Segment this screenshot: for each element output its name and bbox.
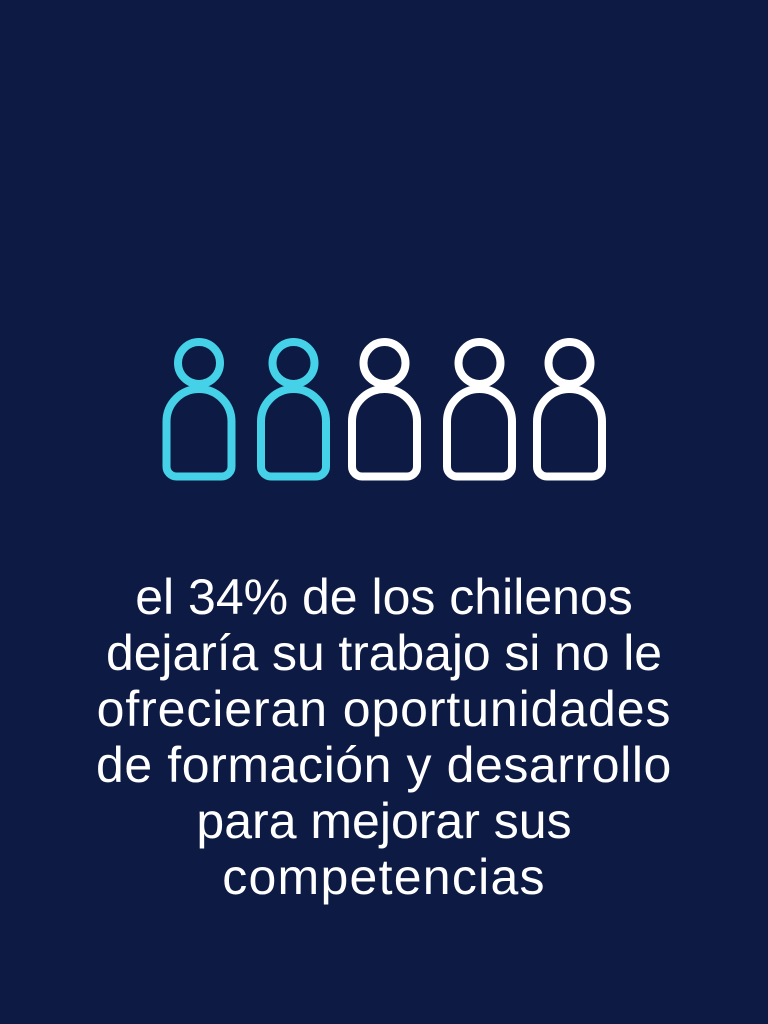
statistic text xyxy=(96,569,672,905)
statistic text: para mejorar sus xyxy=(196,793,572,849)
statistic text: ofrecieran oportunidades xyxy=(97,681,671,737)
statistic text: de formación y desarrollo xyxy=(96,737,672,793)
person 2 cyan xyxy=(261,342,326,476)
person 4 white xyxy=(447,342,512,476)
statistic text: el 34% de los chilenos xyxy=(135,569,633,625)
statistic text: competencias xyxy=(222,849,546,905)
person 3 white xyxy=(352,342,417,476)
statistic text: dejaría su trabajo si no le xyxy=(106,625,662,681)
person 1 cyan xyxy=(166,342,232,476)
person 5 white xyxy=(537,342,602,476)
